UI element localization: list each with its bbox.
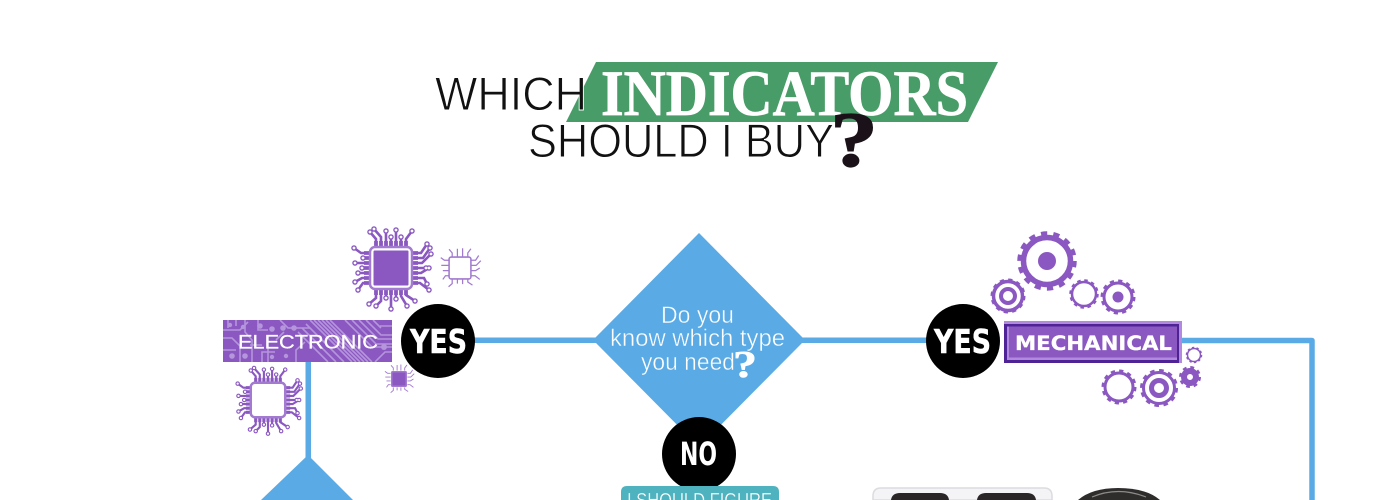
icon: tiny gear	[1186, 348, 1202, 362]
icon: tiny filled chip	[385, 365, 414, 393]
icon: small solid gear	[1180, 368, 1200, 386]
callout: I should figure	[621, 486, 779, 500]
electronic label	[223, 320, 392, 362]
title word: WHICH: WHICH	[435, 67, 587, 120]
icon: small outline chip	[441, 248, 481, 287]
no badge	[662, 417, 736, 491]
yes badge: electronic: YES	[409, 322, 467, 361]
icon: gear left	[992, 280, 1024, 312]
icon: lower outline chip	[238, 368, 301, 434]
yes badge: mechanical: YES	[933, 322, 991, 361]
decision diamond: do you know which type	[593, 233, 805, 447]
diamond question text: Do you	[661, 302, 734, 329]
no badge: NO	[680, 435, 717, 473]
icon: gear with dot	[1102, 281, 1134, 313]
title line: SHOULD I BUY: SHOULD I BUY	[528, 114, 834, 167]
icon: large gear	[1020, 234, 1074, 288]
diamond question text: you need	[641, 349, 735, 376]
lower left diamond	[261, 455, 353, 500]
title banner	[566, 62, 998, 122]
icon: gear outline middle	[1070, 280, 1098, 308]
product photo: electronic indicator	[873, 488, 1052, 500]
mechanical label	[1004, 321, 1182, 363]
diamond question text: know which type	[610, 325, 785, 352]
product photo: dial indicator	[1078, 488, 1160, 500]
title	[435, 58, 998, 183]
flow line: left connector	[470, 338, 600, 343]
icon: gear outline lower	[1103, 371, 1135, 403]
title question mark: ?	[830, 96, 878, 183]
flow line: mechanical to right branch	[1175, 340, 1312, 500]
yes badge: mechanical	[926, 304, 1000, 378]
icon: large filled chip	[354, 229, 431, 309]
flow line: electronic downward	[306, 358, 311, 458]
title word: INDICATORS: INDICATORS	[601, 58, 968, 130]
yes badge: electronic	[401, 304, 475, 378]
flow line: right connector	[800, 338, 935, 343]
diamond question mark: ?	[733, 344, 757, 386]
icon: gear double ring	[1142, 370, 1176, 406]
electronic text: ELECTRONIC	[238, 332, 378, 354]
mechanical text: MECHANICAL	[1015, 332, 1172, 355]
circuit pattern	[223, 320, 392, 362]
